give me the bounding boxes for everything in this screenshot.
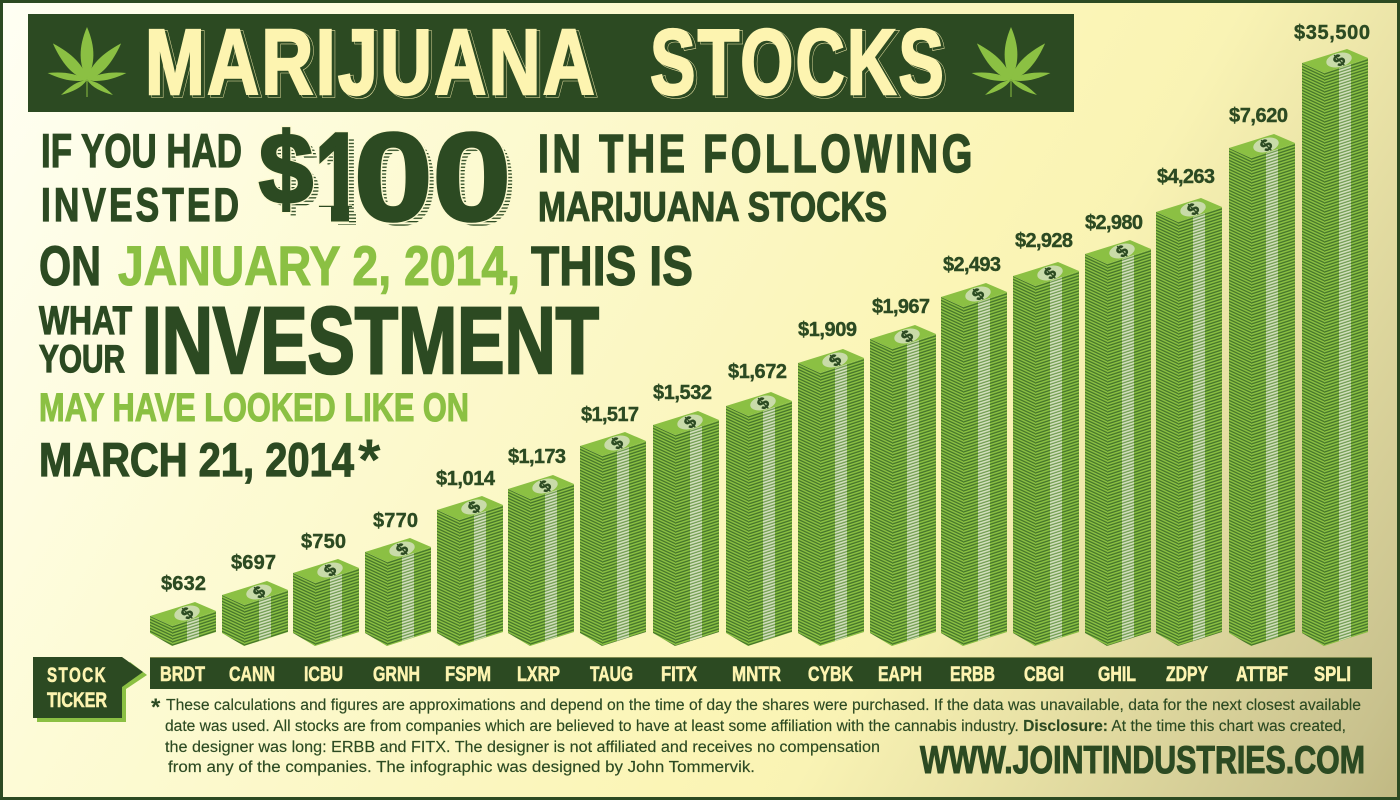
footnote: the designer was long: ERBB and FITX. The designer is not affiliated and receives no compensation <box>165 739 880 756</box>
line: what your: WHAT <box>39 299 132 343</box>
stack: GHIL <box>1085 240 1151 646</box>
stack: ATTBF: $ <box>1256 135 1277 155</box>
ticker bar: TAUG <box>590 663 633 686</box>
big $100 amount: 1 <box>314 108 363 247</box>
stack: FSPM: $ <box>464 497 485 517</box>
stack: ICBU <box>293 559 359 646</box>
ticker bar: MNTR <box>732 663 781 686</box>
title shadow outline: STOCKS <box>653 12 949 116</box>
value labels: $1,517 <box>581 404 639 426</box>
big $100 amount <box>257 126 512 226</box>
stack: EAPH <box>870 325 936 646</box>
stack: BRDT: $ <box>177 603 198 623</box>
title shadow outline: STOCKS <box>653 12 949 116</box>
value labels <box>161 22 1370 595</box>
stack: ERBB <box>941 283 1007 646</box>
headline text block <box>39 108 976 493</box>
line: marijuana stocks: MARIJUANA STOCKS <box>538 183 887 230</box>
ticker bar: LXRP <box>517 663 560 686</box>
ticker bar: FSPM <box>445 663 491 686</box>
stack: CYBK: $ <box>825 350 846 370</box>
line: what your <box>39 299 132 381</box>
ticker bar: CANN <box>229 663 275 686</box>
footnote: * <box>151 694 161 721</box>
title text: STOCKS <box>650 10 946 114</box>
stack: GRNH: $ <box>392 539 413 559</box>
stack: CYBK <box>798 349 864 646</box>
line: march 21 2014: MARCH 21, 2014 <box>39 433 354 486</box>
ticker bar: GRNH <box>373 663 420 686</box>
line: what your: YOUR <box>39 338 125 381</box>
stack: BRDT <box>150 602 216 646</box>
line: may have looked like on: MAY HAVE LOOKED LIKE ON <box>39 386 469 430</box>
footnote <box>151 694 1361 776</box>
value labels: $697 <box>231 552 276 574</box>
stack: FSPM <box>437 496 503 646</box>
footnote: date was used. All stocks are from companies which are believed to have at least some affiliation with the cannabis industry. Disclosure: At the time this chart was created, <box>165 718 1346 735</box>
stack: CBGI <box>1013 262 1079 646</box>
title banner <box>28 10 1074 116</box>
stock ticker arrow label <box>33 657 147 722</box>
ticker bar: GHIL <box>1098 663 1136 686</box>
value labels: $1,014 <box>436 468 496 490</box>
stack: CANN <box>222 581 288 646</box>
big $100 amount: 00 <box>354 108 511 247</box>
bar chart: stacks of money <box>150 49 1368 646</box>
value labels: $770 <box>373 510 418 532</box>
line: investment: INVESTMENT <box>142 288 599 394</box>
title text: MARIJUANA <box>145 10 597 114</box>
line: in the following: IN THE FOLLOWING <box>538 124 976 184</box>
stack: GRNH <box>365 538 431 646</box>
big $100 amount: $ <box>259 113 313 225</box>
value labels: $1,672 <box>728 361 787 383</box>
value labels: $1,967 <box>872 296 930 318</box>
stack: SPLI: $ <box>1329 50 1350 70</box>
value labels: $750 <box>301 531 346 553</box>
asterisk: * <box>358 428 381 493</box>
value labels: $1,532 <box>653 382 712 404</box>
stack: ICBU: $ <box>320 560 341 580</box>
stack: ATTBF <box>1229 134 1295 646</box>
ticker bar: ERBB <box>950 663 995 686</box>
stack: CBGI: $ <box>1040 263 1061 283</box>
stock ticker arrow label: TICKER <box>47 689 107 712</box>
stack: ZDPY: $ <box>1183 199 1204 219</box>
icon: cannabis leaf right <box>971 27 1051 97</box>
title shadow outline: MARIJUANA <box>148 12 600 116</box>
ticker bar: CBGI <box>1024 663 1064 686</box>
ticker bar: CYBK <box>808 663 853 686</box>
stack: ERBB: $ <box>968 284 989 304</box>
stock ticker arrow label: STOCK <box>47 664 107 687</box>
stack: TAUG <box>580 432 646 646</box>
ticker bar: BRDT <box>160 663 205 686</box>
ticker bar: SPLI <box>1314 663 1351 686</box>
big $100 amount: 00 <box>361 113 518 252</box>
value labels: $2,493 <box>943 254 1001 276</box>
value labels: $4,263 <box>1157 166 1215 188</box>
line: invested: INVESTED <box>41 178 242 231</box>
big $100 amount: 00 <box>354 108 511 247</box>
big $100 amount: $ <box>266 118 320 230</box>
ticker bar: ZDPY <box>1166 663 1208 686</box>
stack: CANN: $ <box>249 582 270 602</box>
line: if you had: IF YOU HAD <box>41 124 242 177</box>
ticker bar: EAPH <box>878 663 922 686</box>
big $100 amount: $ <box>259 113 313 225</box>
value labels: $1,173 <box>508 446 566 468</box>
stack: EAPH: $ <box>897 326 918 346</box>
stack: MNTR <box>726 392 792 646</box>
stack: MNTR: $ <box>753 393 774 413</box>
ticker bar: FITX <box>661 663 697 686</box>
stack: TAUG: $ <box>607 433 628 453</box>
stack: LXRP: $ <box>535 476 556 496</box>
stack: FITX <box>653 411 719 646</box>
value labels: $2,980 <box>1085 212 1143 234</box>
ticker bar: ICBU <box>304 663 343 686</box>
stack: FITX: $ <box>680 412 701 432</box>
footnote: from any of the companies. The infographic was designed by John Tommervik. <box>168 759 755 776</box>
stack: SPLI <box>1302 49 1368 646</box>
title shadow outline: MARIJUANA <box>148 12 600 116</box>
ticker bar: ATTBF <box>1236 663 1288 686</box>
value labels: $1,909 <box>798 319 857 341</box>
stack: ZDPY <box>1156 198 1222 646</box>
line: on january 2 2014 this is: THIS IS <box>531 234 693 297</box>
value labels: $2,928 <box>1015 230 1073 252</box>
line: on january 2 2014 this is: ON <box>39 234 101 297</box>
value labels: $632 <box>161 573 206 595</box>
ticker bar <box>150 657 1372 689</box>
icon: cannabis leaf left <box>47 27 127 97</box>
value labels: $7,620 <box>1229 105 1288 127</box>
big $100 amount: 1 <box>322 113 370 252</box>
value labels: $35,500 <box>1294 22 1370 44</box>
stack: LXRP <box>508 475 574 646</box>
line: on january 2 2014 this is: JANUARY 2, 2014, <box>118 234 520 297</box>
big $100 amount: 1 <box>314 108 363 247</box>
footnote: These calculations and figures are approximations and depend on the time of day the shares were purchased. If the data was unavailable, data for the next closest available <box>166 697 1361 714</box>
stack: GHIL: $ <box>1112 241 1133 261</box>
